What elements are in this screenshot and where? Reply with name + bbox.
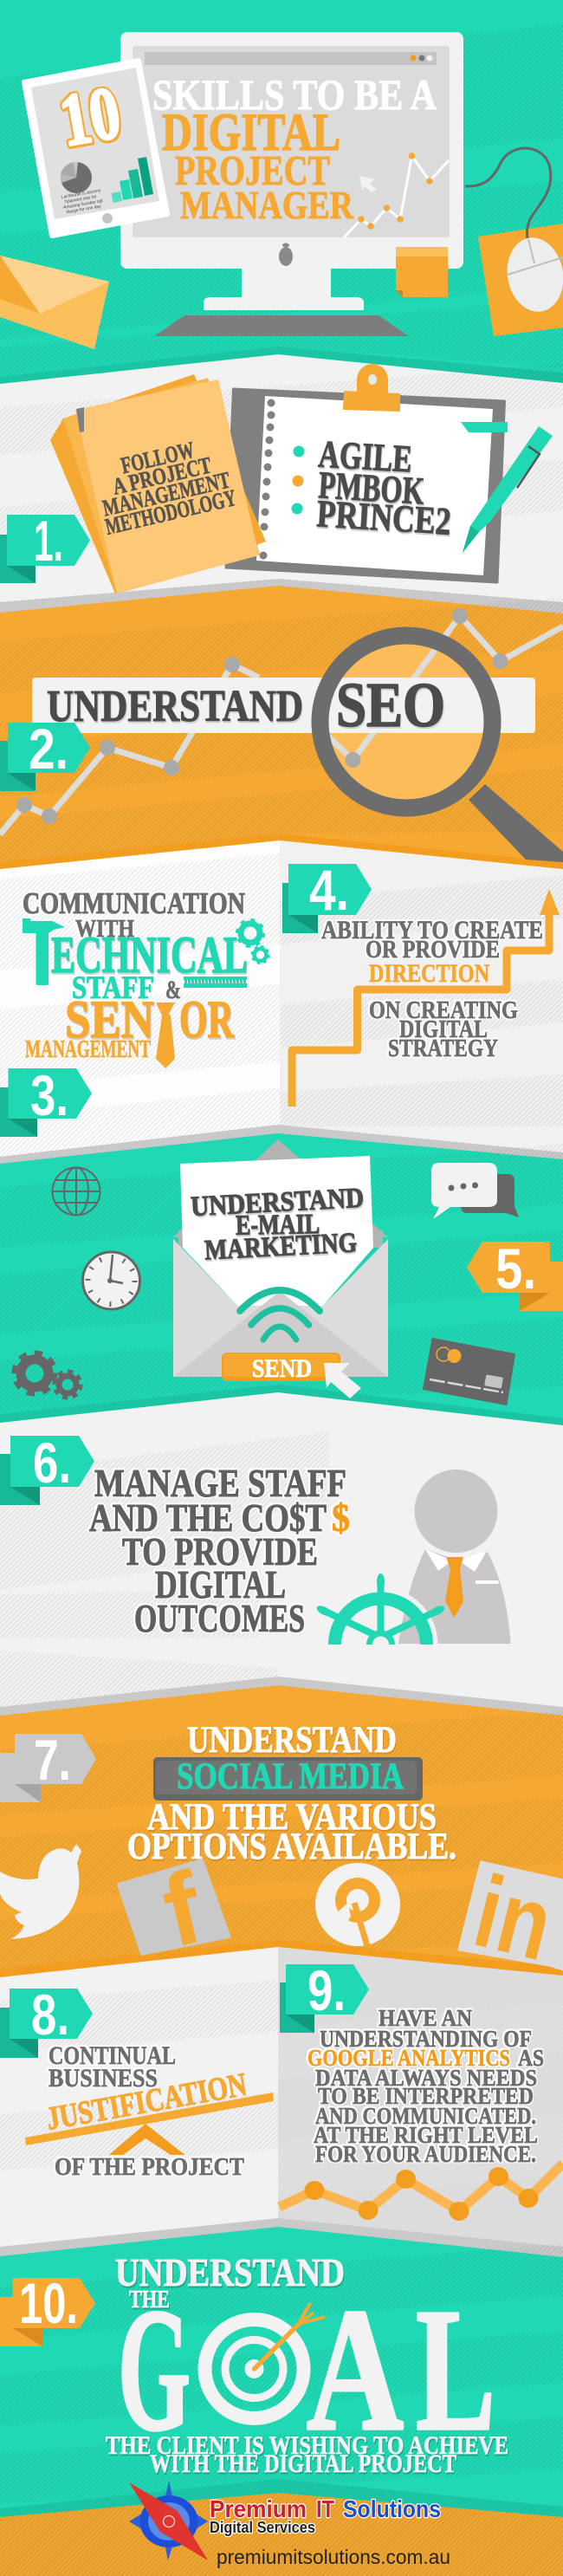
text: communication with technical staff and senior management: OR [179,991,235,1049]
text: manage staff and the costs: DIGITAL [155,1563,286,1606]
icon: compass [129,2481,208,2560]
arrow: rising staircase [292,889,560,1106]
text: communication with technical staff and senior management [23,886,248,1063]
text: communication with technical staff and senior management: & [165,976,181,1004]
list: methodologies: PMBOK [317,464,425,512]
icon: mouse and pad [465,148,563,336]
badge: number 1: 1. [34,509,63,573]
button: send [222,1353,340,1383]
list: methodologies: AGILE [317,432,413,481]
panel: step 4 direction [282,858,560,1106]
badge: number 4: 4. [309,858,349,922]
icon: tablet with number 10: Lat liburtin is dummy [61,188,101,200]
panel: step 6 manage staff [0,1436,511,1645]
panel: step 5 email marketing [15,1139,563,1405]
icon: tablet with number 10 [24,61,167,236]
text: the client is wishing to achieve: WITH THE DIGITAL PROJECT [150,2449,456,2478]
badge: number 5 [467,1236,563,1311]
icon: folder of papers: METHODOLOGY [103,484,238,540]
icon: open envelope: MARKETING [204,1227,358,1267]
title [152,70,437,227]
button: send: SEND [252,1354,312,1383]
website url: premiumitsolutions.com.au [217,2546,450,2568]
text: understand the goal: L [416,2272,495,2467]
text: understand social media: SOCIAL MEDIA [177,1756,404,1797]
search bar with heading: UNDERSTAND [47,682,303,731]
title: DIGITAL [162,104,340,162]
text: manage staff and the costs: OUTCOMES [134,1597,305,1640]
text: understand social media: OPTIONS AVAILABLE. [127,1827,456,1867]
panel: header computer scene [0,32,563,349]
icon: tablet with number 10: Amazing Sunday sgt [63,198,103,211]
icon: magnifying glass [320,636,563,862]
text: google analytics paragraph [307,2005,544,2167]
text: continual business justification: JUSTIFICATION [43,2067,249,2138]
company name [210,2495,441,2536]
icon: envelope [0,256,109,349]
text: communication with technical staff and senior management: SEN [65,991,154,1049]
icon: credit card [424,1339,514,1405]
text: ability to create direction [321,916,543,1062]
badge: number 3: 3. [30,1063,68,1127]
badge: number 2: 2. [29,717,68,781]
badge: number 4 [282,858,372,933]
search bar with heading [32,670,535,740]
icon: cogs [15,1353,81,1398]
icon: target with arrow: O [249,2364,258,2377]
badge: number 10: 10. [19,2271,78,2335]
icon: seesaw balance [25,2093,274,2155]
company name: Digital Services [210,2519,315,2536]
icon: pen [463,426,553,553]
badge: number 10 [0,2271,95,2346]
badge: number 5: 5. [495,1236,536,1301]
icon: necktie: I [162,1014,169,1036]
chart: orange analytics line [279,2164,563,2221]
text: ability to create direction: DIRECTION [369,959,489,988]
text: ability to create direction: DIGITAL [399,1015,488,1043]
text: understand the goal: A [307,2272,404,2467]
icon: globe [52,1167,100,1216]
text: manage staff and the costs: TO PROVIDE [122,1530,318,1574]
badge: number 7 [0,1728,96,1802]
search bar with heading: SEO [336,670,445,740]
icon: tablet with number 10: 10 [54,70,126,162]
list: methodologies [291,432,452,542]
panel: step 10 goal [0,2250,508,2478]
badge: number 9 [280,1958,369,2033]
logo: premium it solutions [129,2481,450,2568]
icon: facebook tile: f [153,1850,212,1969]
title: SKILLS TO BE A [152,70,437,119]
text: manage staff and the costs: MANAGE STAFF [94,1462,346,1505]
text: communication with technical staff and senior management: COMMUNICATION [23,886,245,920]
icon: tablet with number 10: Marge for one day [66,204,102,215]
title: MANAGER [180,183,354,227]
text: understand social media [127,1720,456,1867]
icon: open envelope: UNDERSTAND [190,1183,365,1223]
text: continual business justification: OF THE PROJECT [55,2153,244,2181]
chart: screen line graph [344,152,449,237]
text: continual business justification: CONTINUAL [49,2041,176,2070]
text: understand social media: AND THE VARIOUS [147,1797,437,1838]
text: communication with technical staff and senior management: STAFF [72,970,154,1006]
icon: cursor arrow [324,1363,361,1398]
icon: folder of papers: FOLLOW [119,437,197,478]
text: manage staff and the costs: $ [332,1496,350,1540]
badge: number 6: 6. [33,1431,71,1495]
icon: folder of papers: A PROJECT [110,451,214,500]
text: communication with technical staff and senior management: MANAGEMENT [25,1036,151,1063]
company name: IT [316,2495,334,2522]
panel: step 1 methodology [0,364,553,594]
text: understand the goal: THE [129,2287,170,2313]
icon: magnifier lens [324,640,489,805]
icon: ship wheel [317,1574,445,1645]
icon: open envelope [173,1139,388,1377]
icon: hammer: T [40,948,47,977]
badge: number 8 [0,1982,93,2058]
text: ability to create direction: STRATEGY [388,1035,498,1062]
icon: hammer [23,918,65,985]
text: google analytics paragraph: GOOGLE ANALYTICS [307,2045,510,2071]
title: PROJECT [175,146,330,194]
icon: tablet with number 10: Tylamont clas lot [64,194,97,205]
icon: desktop monitor [120,32,463,336]
icon: clock [83,1252,140,1309]
company name: Solutions [343,2495,441,2522]
panel: step 2 SEO [0,608,563,862]
panel: step 3 communication [0,886,269,1137]
badge: number 3 [0,1063,92,1137]
text: continual business justification [43,2041,249,2181]
text: understand the goal: UNDERSTAND [115,2250,345,2294]
text: understand the goal: G [118,2272,191,2467]
badge: number 1 [0,509,90,583]
icon: clipboard [226,364,508,582]
icon: wifi signal [240,1290,320,1340]
text: continual business justification: BUSINESS [49,2064,158,2093]
icon: chat bubbles [431,1163,519,1219]
chart: SEO rising line [0,608,563,834]
text: communication with technical staff and senior management: WITH [75,916,134,943]
text: understand the goal [115,2250,495,2467]
icon: open envelope: E-MAIL [236,1209,320,1242]
panel: step 9 analytics [279,1958,563,2221]
icon: necktie [156,1002,175,1068]
text: google analytics paragraph: DATA ALWAYS NEEDS [315,2065,537,2091]
text: manage staff and the costs: AND THE CO$T [89,1496,327,1540]
badge: number 7: 7. [34,1728,71,1792]
text: understand social media: UNDERSTAND [187,1720,397,1761]
text: google analytics paragraph: UNDERSTANDING OF [320,2026,532,2052]
icon: folder of papers: MANAGEMENT [100,467,232,521]
panel: step 7 social media [0,1720,563,1982]
list: methodologies: PRINCE2 [315,492,452,542]
icon: manager figure [398,1470,511,1644]
icon: folder of papers [50,374,266,594]
company name: Premium [210,2495,307,2522]
badge: number 8: 8. [31,1982,69,2047]
text: the client is wishing to achieve [106,2431,508,2478]
icon: ruler [184,977,247,988]
icon: target with arrow [204,2303,325,2418]
icon: pinterest circle [315,1863,400,1946]
text: google analytics paragraph: AT THE RIGHT LEVEL [314,2122,538,2148]
badge: number 6 [0,1431,94,1505]
text: manage staff and the costs [89,1462,350,1640]
icon: sticky note [396,247,448,297]
text: communication with technical staff and senior management: ECHNICAL [51,926,248,983]
text: ability to create direction: ON CREATING [369,996,518,1024]
badge: number 9: 9. [307,1958,346,2022]
text: google analytics paragraph: AS [518,2045,544,2071]
icon: gears [237,920,269,964]
text: google analytics paragraph: HAVE AN [379,2005,472,2031]
text: ability to create direction: OR PROVIDE [366,937,500,964]
icon: screen cursor [359,176,377,192]
badge: number 2 [0,717,90,791]
icon: facebook tile [119,1850,229,1969]
panel: step 8 justification [0,1982,274,2181]
text: google analytics paragraph: TO BE INTERPRETED [318,2083,534,2109]
icon: twitter bird [0,1844,81,1939]
